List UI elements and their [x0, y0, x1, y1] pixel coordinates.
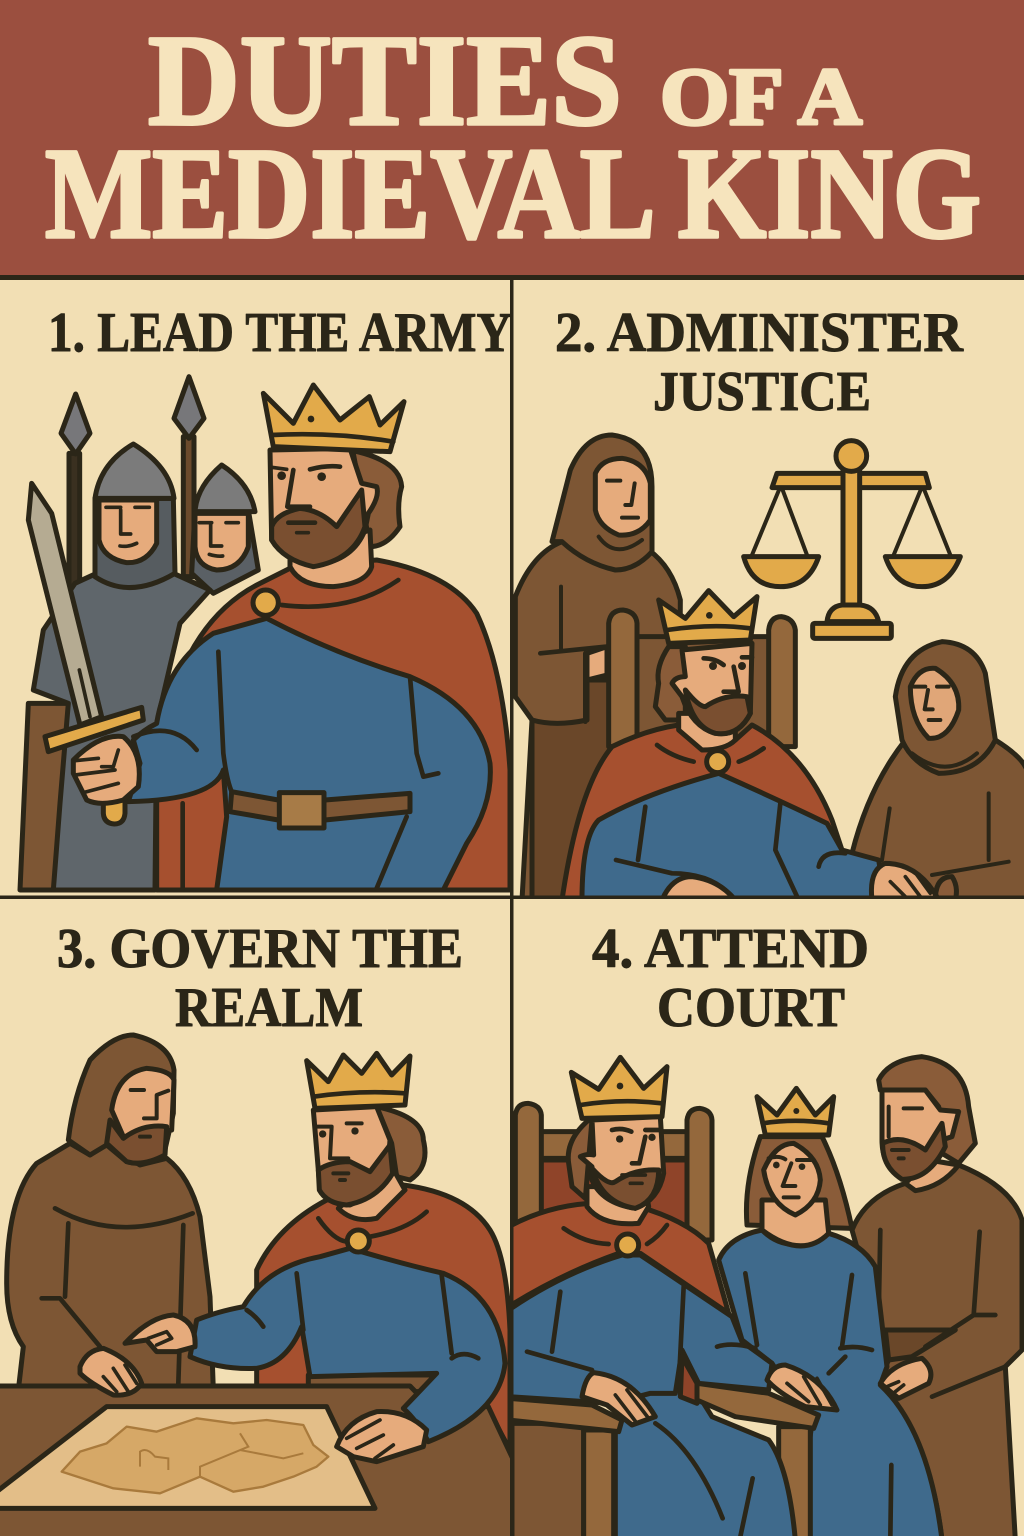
throne back [609, 610, 795, 747]
heading 2: JUSTICE [653, 361, 871, 423]
scales of justice [744, 441, 960, 638]
heading 4: COURT [657, 977, 845, 1039]
heading 4: 4. ATTEND [592, 918, 869, 980]
illustration: king, queen and courtier [509, 1057, 1022, 1536]
heading 3: REALM [175, 977, 363, 1039]
king tunic [509, 1255, 795, 1536]
king cape [509, 1203, 729, 1313]
clasp [564, 1225, 667, 1256]
heading 3: 3. GOVERN THE [57, 918, 463, 980]
panel 1: lead the army [20, 302, 512, 890]
heading 4 [592, 929, 867, 1027]
king right hand [337, 1412, 427, 1462]
spears [61, 377, 204, 587]
title banner [0, 0, 1024, 277]
panel 3: govern the realm [0, 918, 515, 1536]
king blue tunic [128, 618, 490, 890]
illustration: king with sword and soldiers [20, 377, 510, 890]
heading 3 [58, 929, 461, 1026]
king crown [571, 1057, 667, 1118]
seated monk [852, 642, 1024, 900]
title line 1: Duties of a: DUTIES [148, 9, 622, 153]
crown [263, 385, 404, 452]
sword [28, 483, 143, 824]
table [0, 1386, 515, 1536]
map [0, 1407, 375, 1508]
soldier back [192, 465, 258, 593]
monk [7, 1035, 213, 1390]
heading 2 [556, 313, 964, 411]
soldier front [20, 444, 210, 890]
hands [582, 1358, 931, 1425]
king cape [157, 560, 510, 890]
king head [568, 1117, 664, 1224]
standing monk [515, 435, 680, 900]
throne [512, 1103, 810, 1536]
illustration: king and monk with map [0, 1035, 515, 1536]
clasp [318, 1212, 427, 1252]
king hand [73, 736, 139, 803]
gap behind the king's arm [222, 1370, 250, 1383]
king pointing hand [125, 1315, 195, 1352]
monk hand [80, 1348, 142, 1395]
title line 1: Duties of a: OF A [660, 51, 862, 142]
crown [307, 1053, 410, 1108]
heading 1: 1. LEAD THE ARMY [48, 302, 512, 364]
king head [270, 448, 402, 587]
chair arms [509, 1383, 819, 1432]
title line 1: Duties of a [148, 9, 862, 153]
cape clasp [253, 580, 398, 615]
panel 4: attend court [509, 918, 1022, 1536]
king head [313, 1107, 425, 1220]
king belt [308, 1375, 433, 1392]
king tunic [190, 1248, 505, 1442]
illustration: king on throne with monks and scales [515, 435, 1024, 900]
seated king [562, 591, 885, 900]
king hand [871, 863, 939, 900]
courtier [852, 1057, 1022, 1536]
queen [717, 1088, 942, 1536]
panel 2: administer justice [515, 302, 1024, 900]
king cape [257, 1185, 510, 1450]
heading 2: 2. ADMINISTER [555, 302, 964, 364]
